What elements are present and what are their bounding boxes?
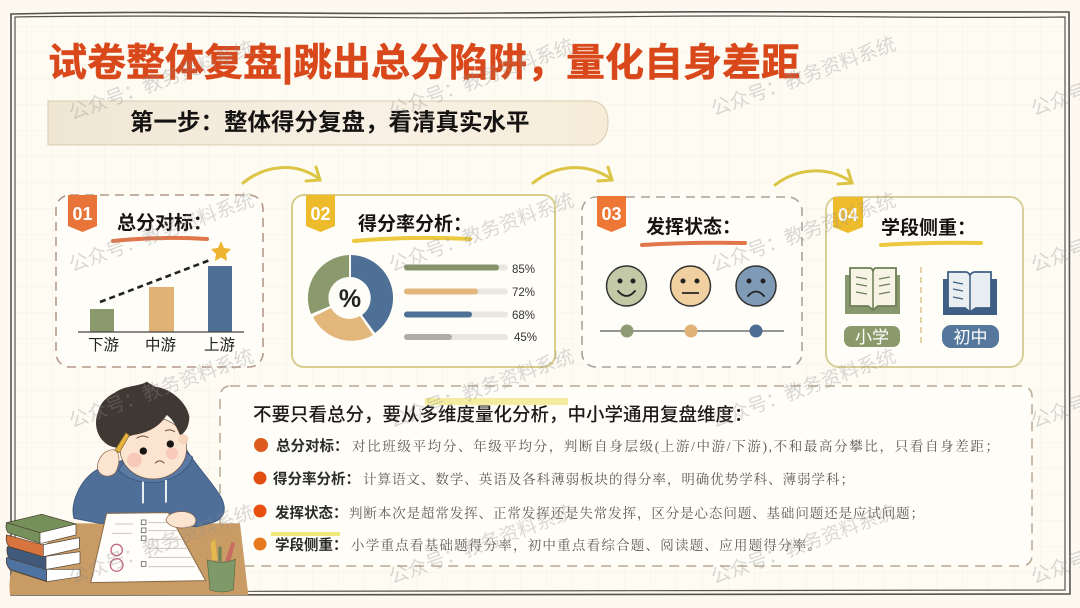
hoodie	[73, 450, 224, 527]
watermarks: 公众号：教务资料系统	[386, 345, 577, 433]
title: 试卷整体复盘|跳出总分陷阱，量化自身差距	[48, 42, 800, 85]
hand	[97, 450, 119, 476]
book stack	[6, 514, 80, 582]
watermarks: 公众号：教务资料系统	[66, 501, 257, 589]
item: 发挥状态: 发挥状态：	[275, 504, 348, 522]
donut chart: %	[339, 285, 361, 313]
panel: 发挥状态	[582, 196, 802, 367]
watermarks: 公众号：教务资料系统	[708, 345, 899, 433]
divider	[920, 267, 922, 347]
item: 学段侧重: 小学重点看基础题得分率，初中重点看综合题、阅读题、应用题得分率。	[351, 537, 821, 554]
highlight	[271, 532, 340, 536]
badge 01: 01	[72, 204, 93, 224]
brush underline	[642, 243, 745, 245]
brush underline	[354, 238, 470, 241]
pill: 初中: 初中	[954, 328, 988, 347]
badge 02	[306, 195, 335, 232]
head	[120, 418, 187, 479]
panel: 学段侧重	[826, 197, 1023, 367]
icon: neutral face	[670, 266, 710, 306]
watermarks: 公众号：教务资料系统	[66, 189, 257, 277]
badge 04	[833, 197, 863, 233]
progress bars: 68%	[512, 310, 535, 322]
heading: 得分率分析：	[358, 213, 472, 235]
heading: 发挥状态：	[646, 215, 741, 238]
item: 发挥状态: 判断本次是超常发挥、正常发挥还是失常发挥，区分是心态问题、基础问题还是应试问题；	[349, 505, 924, 522]
panel: 总分对标	[56, 195, 263, 367]
item: 总分对标: 总分对标：	[276, 437, 348, 455]
heading: 总分对标：	[117, 212, 212, 234]
pill: 小学: 小学	[855, 328, 889, 347]
badge 02: 02	[310, 204, 331, 224]
item: 得分率分析	[254, 470, 854, 488]
progress bars: 85%	[512, 264, 535, 276]
icon: green book	[845, 268, 900, 314]
item: 得分率分析: 计算语文、数学、英语及各科薄弱板块的得分率，明确优势学科、薄弱学科；	[363, 471, 854, 488]
brush underline	[113, 238, 207, 241]
highlight	[425, 398, 568, 405]
badge 01	[68, 195, 97, 232]
watermarks: 公众号：教务资料系统	[386, 35, 577, 123]
watermarks: 公众号：教务资料系统	[708, 33, 899, 121]
pencil	[115, 433, 129, 453]
bar chart: 下游	[88, 336, 119, 354]
watermarks: 公众号：教务资料系统	[66, 37, 257, 125]
brush underline	[881, 243, 981, 245]
status scale	[600, 324, 784, 338]
illustration: thinking boy at desk	[6, 382, 248, 595]
pill: 初中	[942, 325, 999, 348]
icon: blue book	[943, 272, 997, 315]
bar chart: 中游	[145, 336, 176, 354]
hair	[96, 382, 189, 448]
step banner	[48, 101, 608, 145]
arrow 3	[775, 170, 852, 185]
watermarks: 公众号：教务资料系统	[386, 501, 577, 589]
arrow 1	[243, 167, 320, 183]
watermarks: 公众号：教务资料系统	[708, 501, 899, 589]
pill: 小学	[844, 326, 900, 347]
heading: 学段侧重：	[881, 216, 976, 239]
panel: 得分率分析	[292, 195, 555, 367]
watermarks: 公众号：教务资料系统	[66, 345, 257, 433]
item: 学段侧重	[254, 536, 821, 554]
watermarks: 公众号：教务资料系统	[708, 189, 899, 277]
donut chart	[308, 255, 393, 341]
watermarks: 公众号：教务资料系统	[386, 189, 577, 277]
desk	[9, 523, 248, 595]
icon: star	[211, 241, 231, 261]
hand on paper	[166, 512, 196, 528]
step banner: 第一步：整体得分复盘，看清真实水平	[130, 109, 530, 135]
badge 04: 04	[838, 205, 858, 225]
exam paper	[91, 513, 206, 583]
bar chart	[78, 241, 244, 354]
progress bars: 72%	[512, 287, 535, 299]
badge 03	[597, 196, 626, 232]
item: 学段侧重: 学段侧重：	[275, 536, 348, 554]
progress bars: 45%	[514, 332, 537, 344]
bar chart: 上游	[204, 336, 235, 354]
item: 得分率分析: 得分率分析：	[273, 470, 360, 488]
icon: sad face	[736, 266, 776, 306]
progress bars	[404, 264, 537, 344]
panel: review dimensions	[220, 386, 1032, 566]
icon: happy face	[606, 266, 646, 306]
badge 03: 03	[601, 204, 622, 224]
pencil cup	[207, 538, 235, 592]
arrow 2	[533, 167, 612, 183]
summary sentence: 不要只看总分，要从多维度量化分析，中小学通用复盘维度：	[253, 404, 753, 425]
item: 总分对标: 对比班级平均分、年级平均分，判断自身层级(上游/中游/下游),不和最高分攀比，只看自身差距；	[352, 438, 999, 455]
